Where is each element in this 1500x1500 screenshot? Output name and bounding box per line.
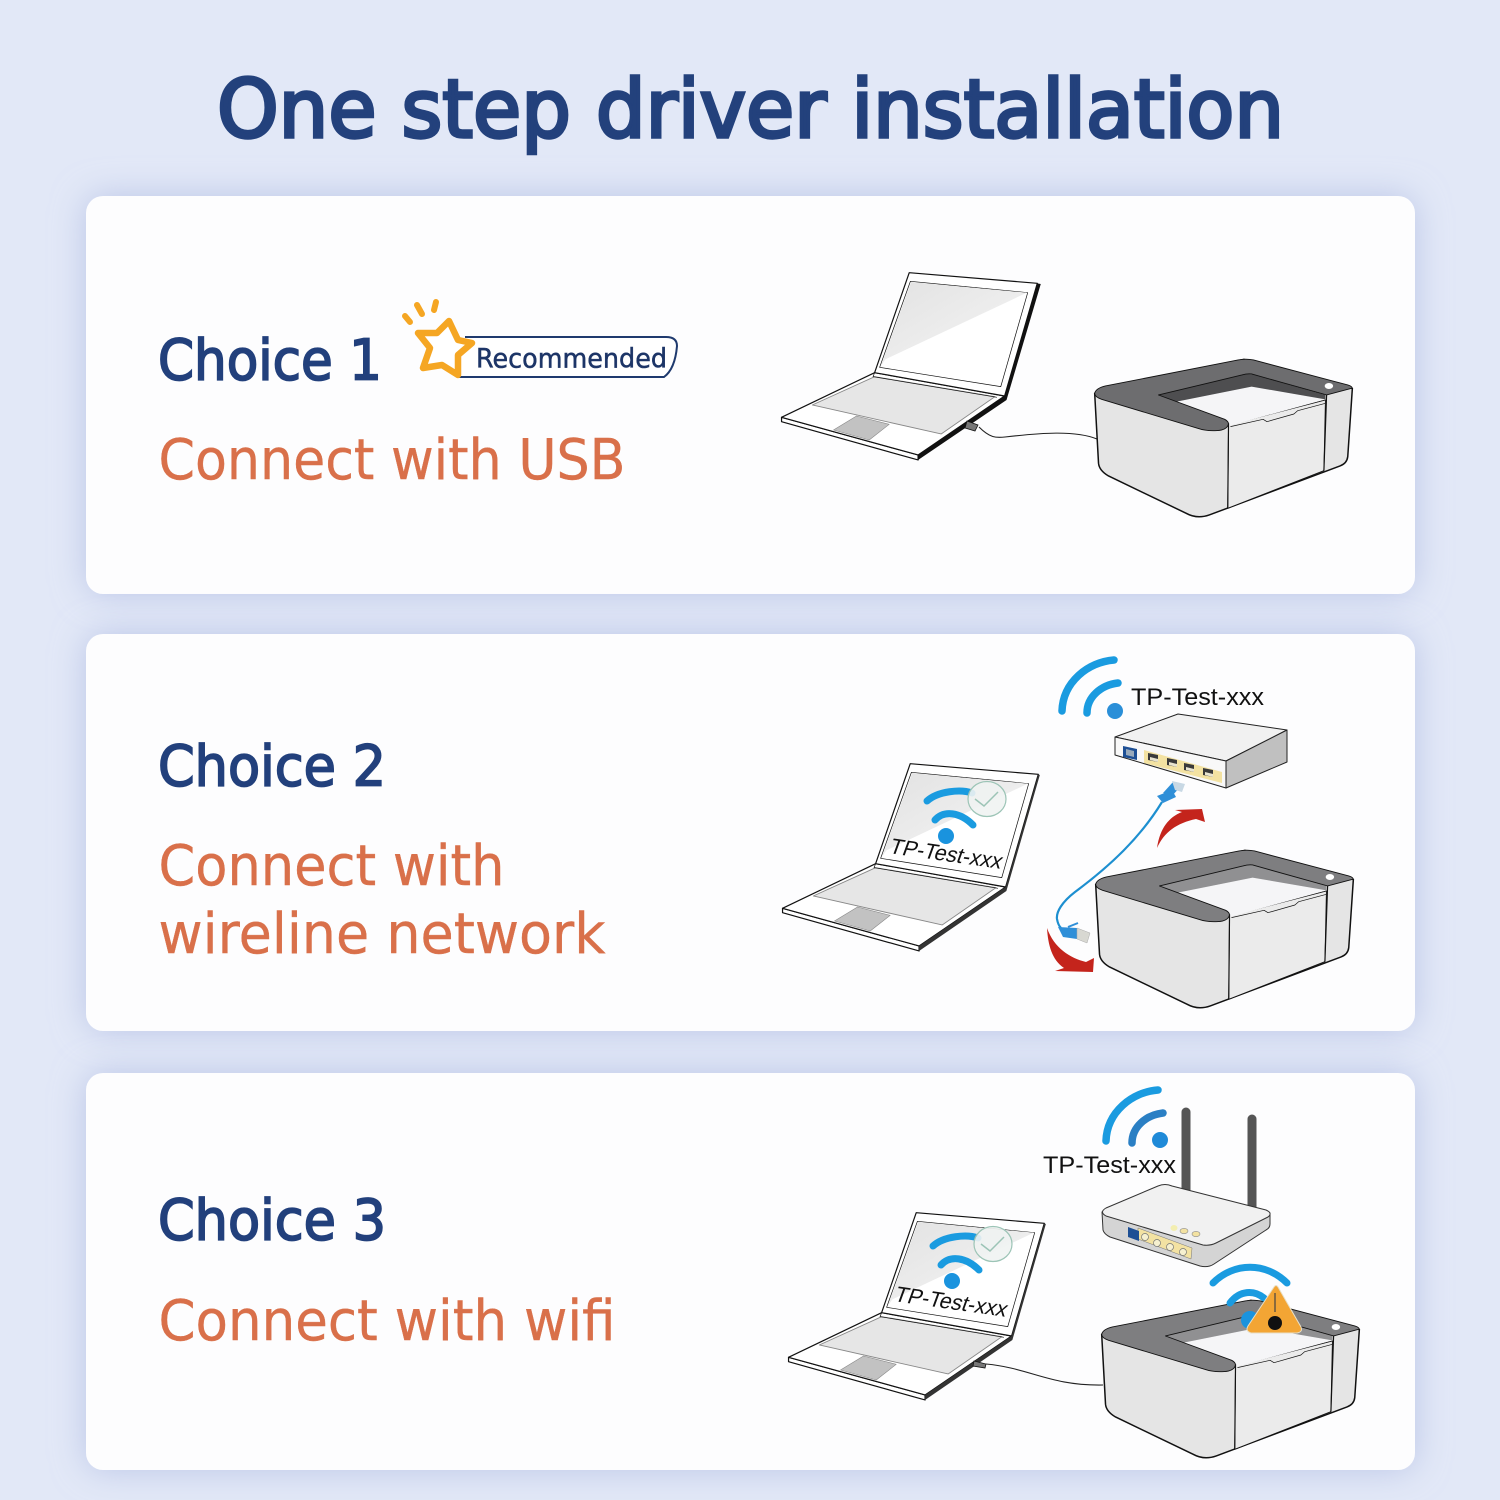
panel: choice 1 [86, 196, 1415, 594]
subheading: connect with wireline network [158, 834, 606, 967]
panel: choice 2 [86, 634, 1415, 1031]
subheading: connect with wireline network: Connect with [158, 834, 504, 899]
label: network name: TP-Test-xxx [1131, 684, 1264, 711]
arrow: up to switch [1157, 809, 1205, 848]
panel: choice 3 [86, 1073, 1415, 1470]
illustration: printer [1102, 1300, 1359, 1458]
USB cable [965, 421, 1097, 439]
illustration: laptop [789, 1213, 1046, 1400]
subheading: connect with wifi: Connect with wifi [158, 1289, 616, 1354]
heading: choice 1: Choice 1 [158, 328, 382, 394]
illustration: router [1102, 1184, 1270, 1267]
icon: printer wifi with warning [1213, 1267, 1302, 1333]
illustration: network switch [1115, 714, 1287, 788]
illustration: printer [1095, 359, 1352, 517]
icon: wifi signal [1106, 1090, 1168, 1148]
USB cable [973, 1361, 1103, 1385]
label: network name: TP-Test-xxx [1043, 1152, 1176, 1179]
label: network name on screen: TP-Test-xxx [886, 834, 1007, 873]
icon: wifi signal [1062, 660, 1123, 719]
badge: recommended: Recommended [476, 344, 667, 374]
heading: choice 3: Choice 3 [158, 1188, 386, 1254]
badge: recommended [405, 302, 677, 377]
ethernet cable [1057, 781, 1185, 943]
icon: wifi on laptop screen [927, 782, 1006, 844]
arrow: down to printer [1047, 928, 1094, 972]
illustration: printer [1096, 850, 1353, 1008]
icon: router antennas [1186, 1112, 1252, 1208]
heading: choice 2: Choice 2 [158, 734, 386, 800]
subheading: connect with USB: Connect with USB [158, 428, 626, 493]
subheading: connect with wireline network: wireline network [158, 902, 606, 967]
title: One step driver installation [217, 63, 1284, 156]
label: network name on screen: TP-Test-xxx [891, 1282, 1012, 1321]
illustration: laptop [783, 764, 1040, 951]
icon: wifi on laptop screen [933, 1226, 1012, 1289]
illustration: laptop [782, 273, 1041, 460]
